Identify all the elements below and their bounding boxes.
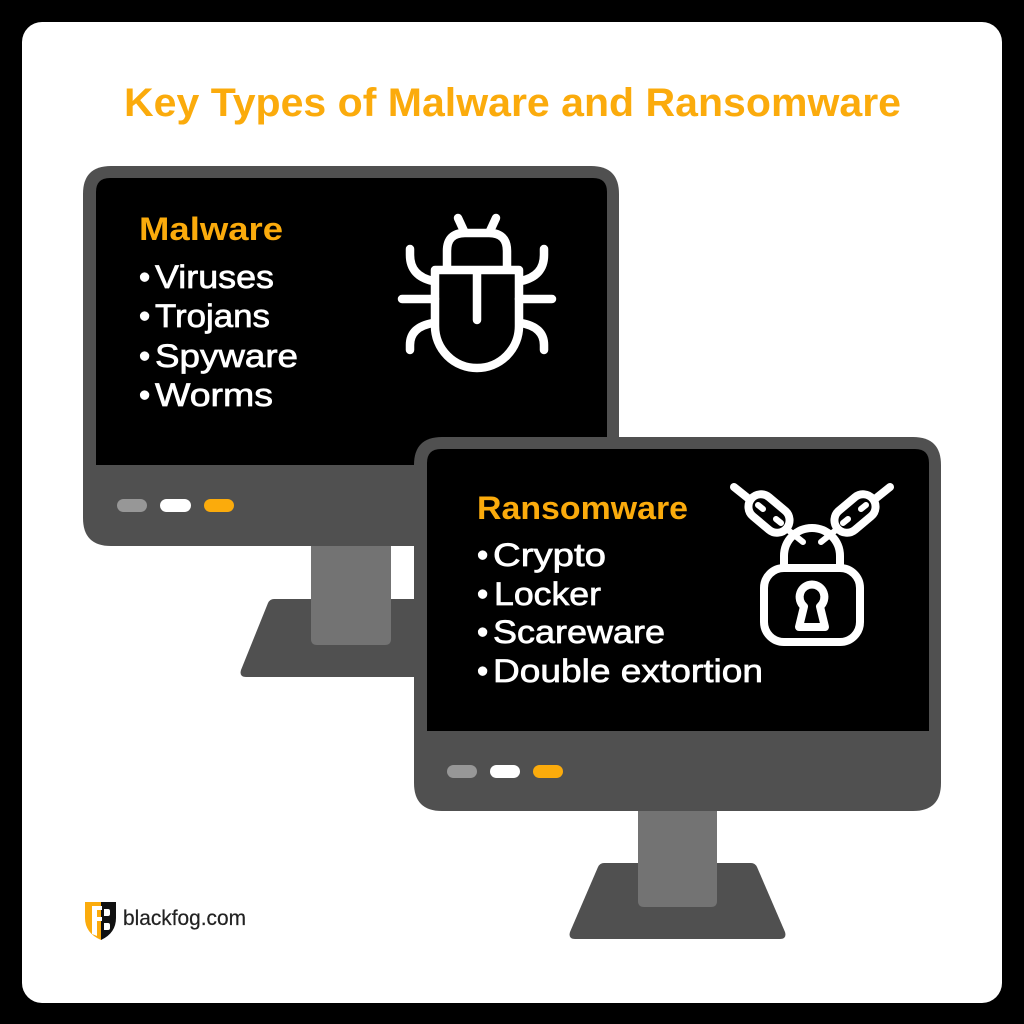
panel: malware monitor (83, 166, 619, 677)
list: ransomware types: Scareware (493, 614, 665, 650)
list: malware types: Worms (155, 377, 273, 413)
heading: Ransomware: Ransomware (477, 490, 688, 526)
list: malware types: Trojans (155, 298, 270, 334)
list: malware types (139, 259, 298, 413)
indicator lights (447, 765, 563, 778)
logo: blackfog.com (85, 902, 246, 940)
list: malware types: Spyware (155, 338, 298, 374)
list: ransomware types: • (477, 653, 488, 689)
list: malware types: Viruses (155, 259, 274, 295)
list: ransomware types: Crypto (493, 537, 606, 573)
list: ransomware types: • (477, 576, 488, 612)
monitor base (241, 599, 480, 677)
panel: ransomware monitor (414, 437, 941, 939)
list: ransomware types: Locker (494, 576, 601, 612)
monitor stand (311, 540, 391, 645)
icon: bug (402, 218, 552, 368)
title: Key Types of Malware and Ransomware (124, 81, 901, 125)
list: ransomware types: • (477, 614, 488, 650)
indicator lights (117, 499, 234, 512)
monitor base (570, 863, 785, 939)
icon: shield (85, 902, 116, 940)
monitor stand (638, 805, 717, 907)
logo text: blackfog.com (123, 907, 246, 930)
list: malware types: • (139, 259, 150, 295)
list: malware types: • (139, 377, 150, 413)
list: ransomware types: • (477, 537, 488, 573)
monitor screen (427, 449, 929, 731)
list: ransomware types: Double extortion (493, 653, 763, 689)
icon: padlock with chains (734, 487, 890, 642)
list: ransomware types (477, 537, 763, 689)
monitor screen (96, 178, 607, 465)
heading: Malware: Malware (139, 211, 283, 247)
list: malware types: • (139, 338, 150, 374)
monitor body (83, 166, 619, 546)
list: malware types: • (139, 298, 150, 334)
monitor body (414, 437, 941, 811)
